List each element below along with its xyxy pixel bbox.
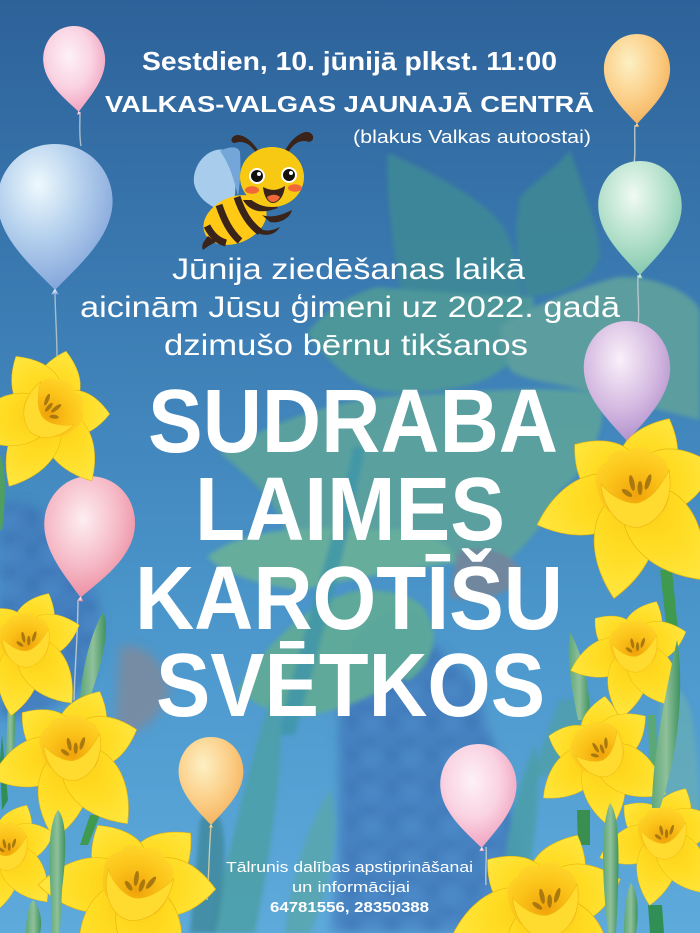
text: venue note: (blakus Valkas autoostai) — [353, 127, 591, 147]
main title: SVĒTKOS — [156, 636, 545, 736]
main title: KAROTĪŠU — [135, 547, 563, 649]
balloon: pink right — [438, 742, 520, 885]
text: contact details — [226, 859, 473, 916]
daffodil: bottom right — [593, 780, 700, 909]
daffodil: right lower — [508, 673, 689, 852]
heading: date and time: Sestdien, 10. jūnijā plkst. 11:00 — [142, 46, 557, 76]
daffodil: bottom left corner — [0, 797, 63, 916]
main title: LAIMES — [195, 460, 505, 560]
daffodil: bottom left large — [4, 775, 248, 933]
text: invitation — [80, 253, 620, 362]
daffodil: right middle — [564, 593, 696, 722]
balloon: purple — [584, 321, 670, 445]
main title: SUDRABA — [148, 372, 558, 472]
text: invitation: aicinām Jūsu ģimeni uz 2022. gadā — [80, 291, 620, 324]
balloon: blue — [0, 144, 113, 358]
text: contact details: un informācijai — [292, 879, 410, 896]
balloon: orange top right — [604, 34, 670, 164]
daffodil: upper left — [0, 313, 157, 533]
daffodil: large right — [527, 406, 700, 604]
balloon: yellow bottom — [179, 737, 243, 900]
text: contact details: Tālrunis dalības apstiprināšanai — [226, 859, 473, 876]
balloon: pink top left — [40, 23, 110, 146]
icon: cartoon bee — [194, 132, 313, 254]
daffodil: bottom centre right — [443, 823, 634, 933]
daffodil: left middle — [0, 585, 89, 719]
text: contact details: 64781556, 28350388 — [270, 899, 429, 916]
green stems and leaves — [0, 455, 679, 933]
daffodil: left lower — [0, 681, 149, 843]
heading: venue: VALKAS-VALGAS JAUNAJĀ CENTRĀ — [105, 91, 594, 117]
main title — [135, 372, 563, 736]
balloon: rose left — [35, 471, 140, 700]
front leaves over flowers — [49, 640, 680, 933]
text: invitation: dzimušo bērnu tikšanos — [164, 329, 528, 362]
text: invitation: Jūnija ziedēšanas laikā — [172, 253, 525, 286]
balloon: green — [598, 161, 682, 325]
